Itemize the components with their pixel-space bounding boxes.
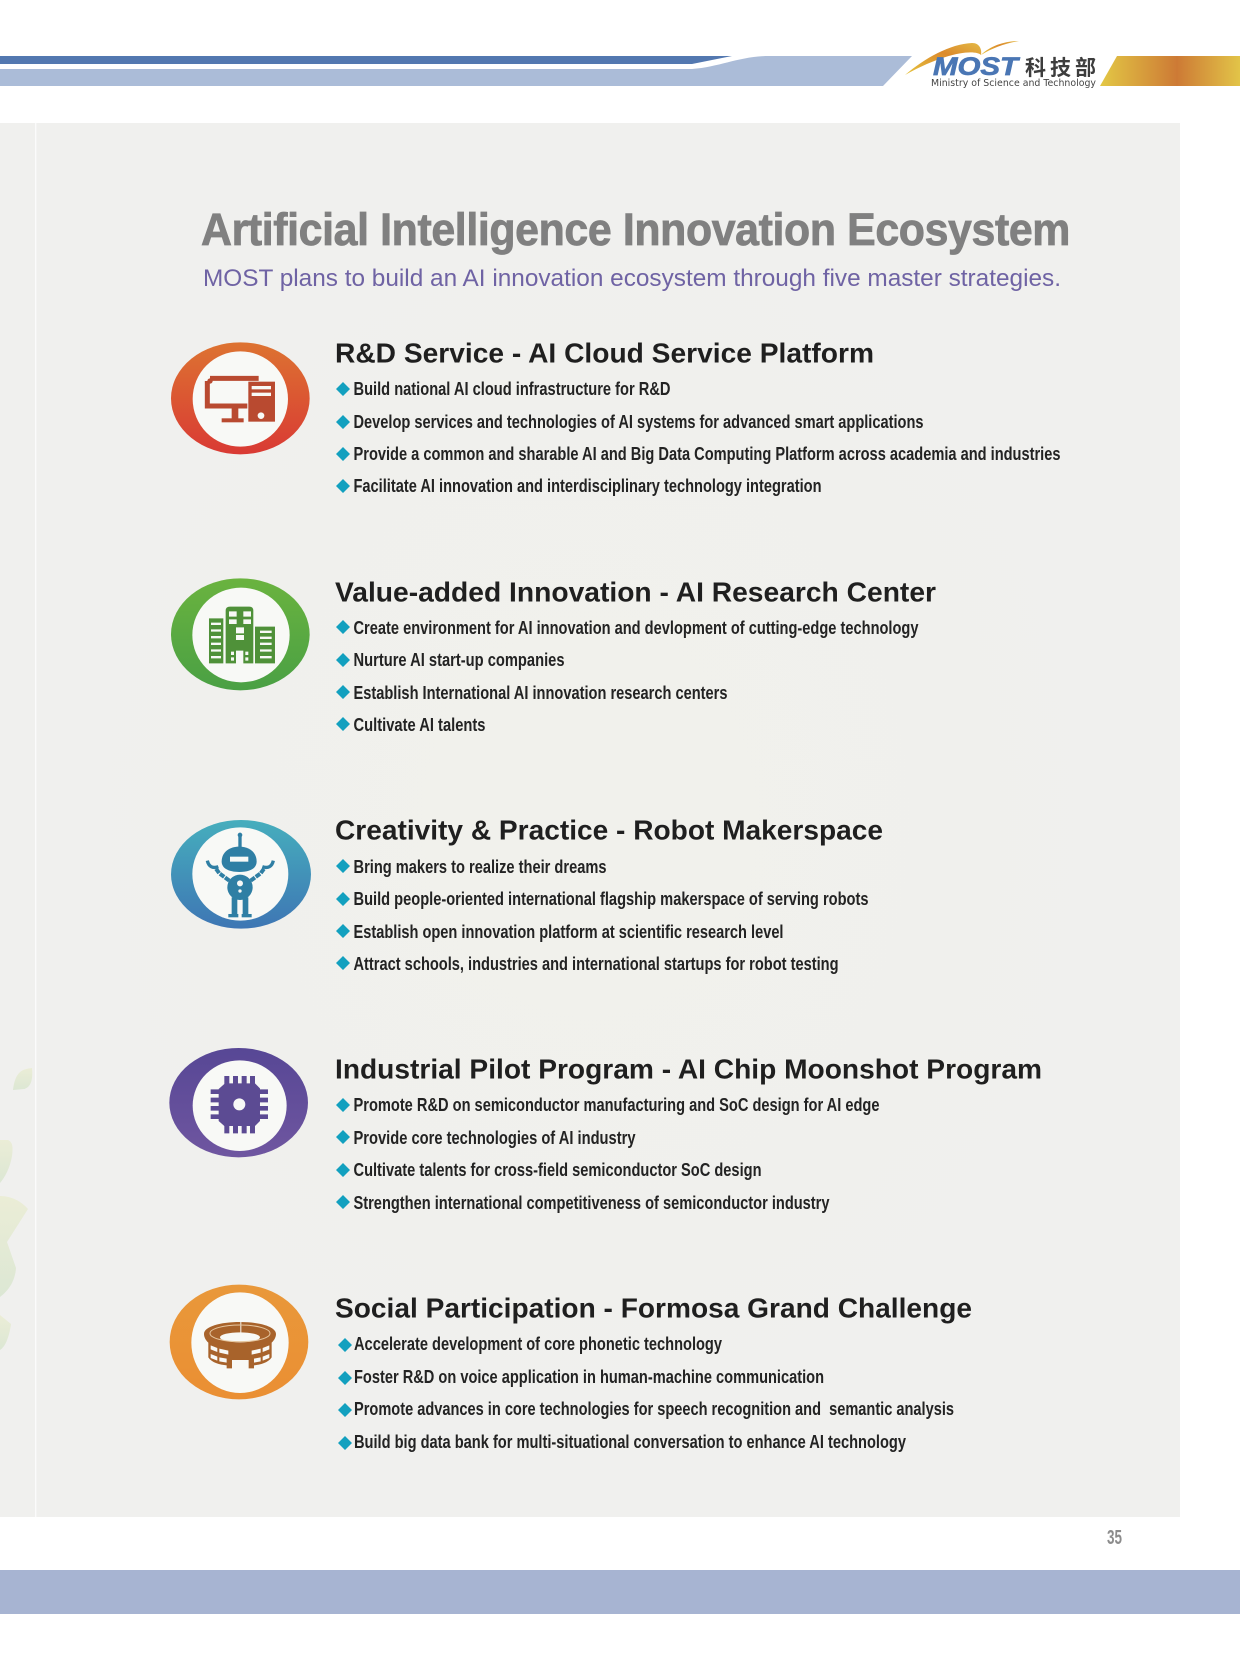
decorative leaves [0,1068,32,1350]
logo: MOST Ministry of Science and Technology [905,41,1096,89]
bullet list: Bring makers to realize their dreams [354,857,606,877]
logo: MOST Ministry of Science and Technology: MOST [933,53,1021,81]
bullet list: Strengthen international competitiveness of semiconductor industry [354,1193,830,1213]
icon: buildings [171,578,310,690]
bullet list [338,1334,954,1452]
bullet list: Develop services and technologies of AI systems for advanced smart applications [354,412,924,432]
bullet list: Create environment for AI innovation and devlopment of cutting-edge technology [354,618,918,638]
logo: MOST Ministry of Science and Technology: 科技部 [1025,52,1096,82]
heading: R&D Service - AI Cloud Service Platform [335,338,874,368]
section: Creativity & Practice [171,814,883,974]
bullet list: Cultivate talents for cross-field semiconductor SoC design [354,1160,762,1180]
section: R&D Service [171,338,1060,496]
bullet list [336,379,1060,496]
icon: chip [169,1048,308,1157]
section: Social Participation [170,1285,972,1452]
bullet list: Foster R&D on voice application in human-machine communication [354,1367,824,1387]
heading: Social Participation - Formosa Grand Challenge [335,1292,972,1324]
bullet list: Nurture AI start-up companies [354,650,564,670]
bullet list: Build big data bank for multi-situational conversation to enhance AI technology [354,1432,906,1452]
section: Industrial Pilot Program [169,1048,1042,1213]
bullet list: Establish International AI innovation research centers [354,683,728,703]
bullet list: Promote advances in core technologies for speech recognition and semantic analysis [354,1399,954,1419]
section: Value-added Innovation [171,576,936,735]
title: Artificial Intelligence Innovation Ecosystem [201,204,1070,255]
bullet list: Cultivate AI talents [354,715,486,735]
heading: Creativity & Practice - Robot Makerspace [335,814,883,846]
bullet list: Build national AI cloud infrastructure for R&D [354,379,670,399]
bullet list [336,618,918,735]
bullet list: Provide core technologies of AI industry [354,1128,636,1148]
bullet list: Attract schools, industries and international startups for robot testing [354,954,838,974]
bullet list: Establish open innovation platform at scientific research level [354,922,784,942]
bullet list [336,1095,880,1213]
bullet list [336,857,868,974]
subtitle: MOST plans to build an AI innovation ecosystem through five master strategies. [203,265,1061,292]
header band [0,56,1240,86]
logo: MOST Ministry of Science and Technology: Ministry of Science and Technology [931,78,1096,89]
icon: stadium [170,1285,308,1399]
heading: Value-added Innovation - AI Research Center [335,576,936,608]
icon: robot [171,820,311,929]
bullet list: Build people-oriented international flagship makerspace of serving robots [354,889,868,909]
bullet list: Accelerate development of core phonetic technology [354,1334,722,1354]
icon: computer [171,342,310,454]
page number: 35 [1107,1527,1122,1549]
heading: Industrial Pilot Program - AI Chip Moonshot Program [335,1054,1042,1084]
bullet list: Facilitate AI innovation and interdisciplinary technology integration [354,476,822,496]
footer band [0,1570,1240,1614]
bullet list: Provide a common and sharable AI and Big Data Computing Platform across academia and industries [354,444,1060,464]
bullet list: Promote R&D on semiconductor manufacturing and SoC design for AI edge [354,1095,880,1115]
